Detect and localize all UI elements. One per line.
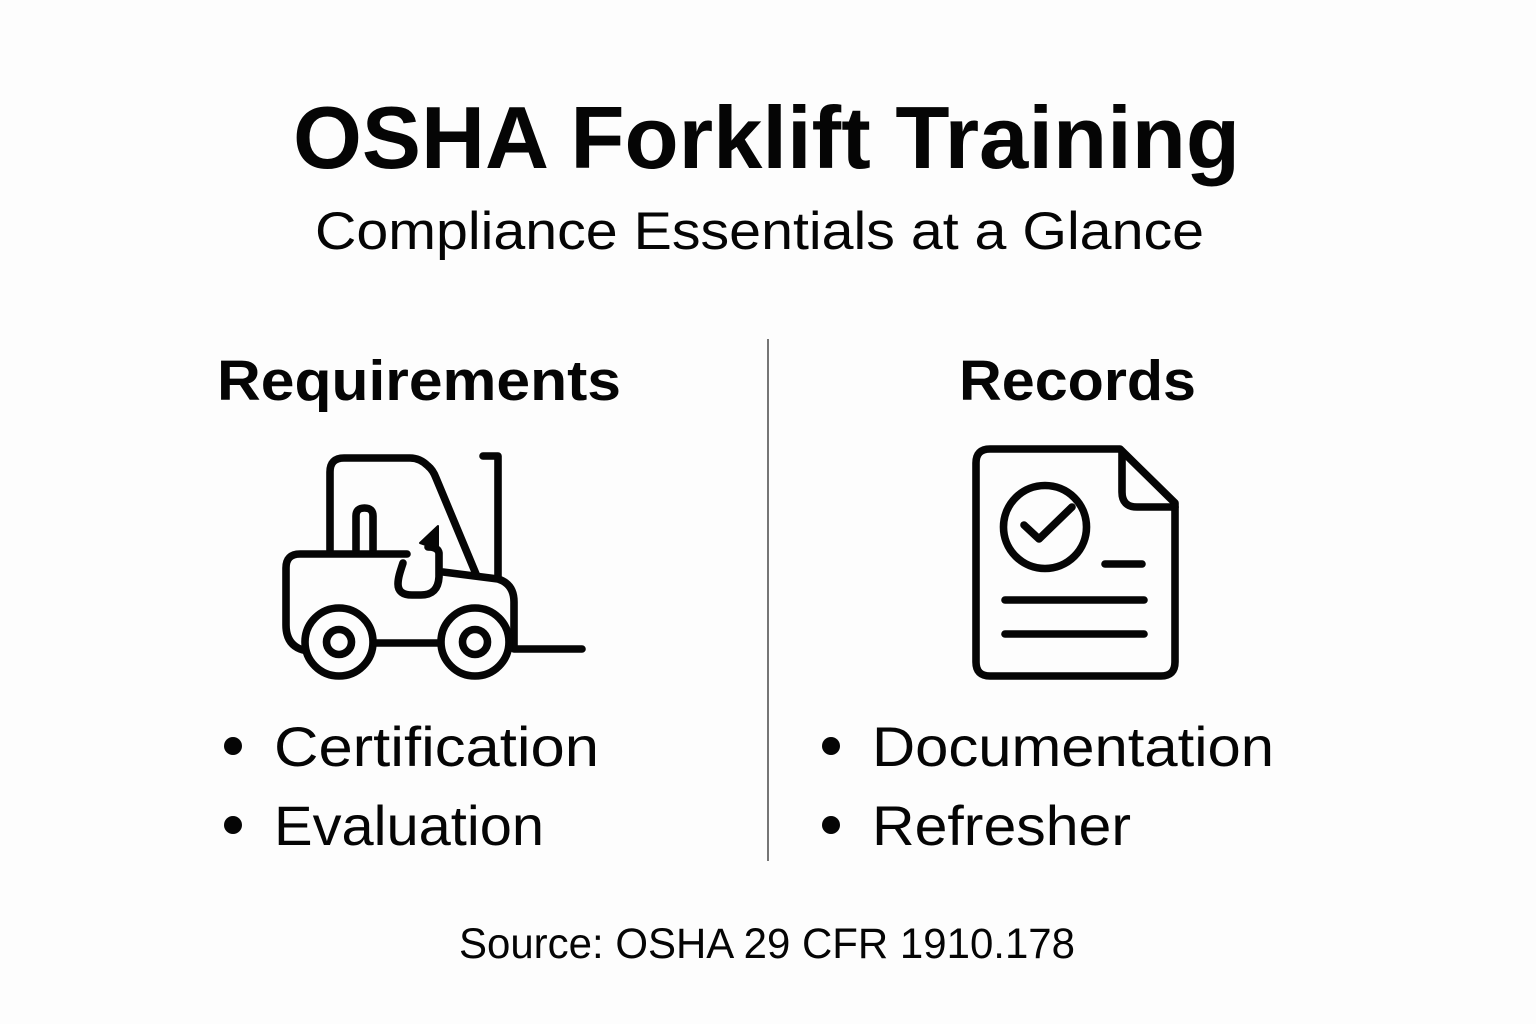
title: OSHA Forklift Training <box>293 88 1240 187</box>
panel: requirements <box>217 349 621 857</box>
icon: document with check <box>976 449 1175 676</box>
panel: records <box>822 349 1274 857</box>
heading: records: Records <box>959 349 1196 413</box>
list: records bullets: Refresher <box>872 794 1131 857</box>
list: records bullets: Documentation <box>872 715 1274 778</box>
list: requirements bullets: Evaluation <box>274 794 544 857</box>
subtitle: Compliance Essentials at a Glance <box>315 202 1204 261</box>
list: requirements bullets: Certification <box>274 715 599 778</box>
icon: forklift <box>286 456 582 676</box>
list: requirements bullets <box>224 715 599 857</box>
heading: requirements: Requirements <box>217 349 621 413</box>
source note: Source: OSHA 29 CFR 1910.178 <box>459 920 1075 968</box>
list: records bullets <box>822 715 1274 857</box>
